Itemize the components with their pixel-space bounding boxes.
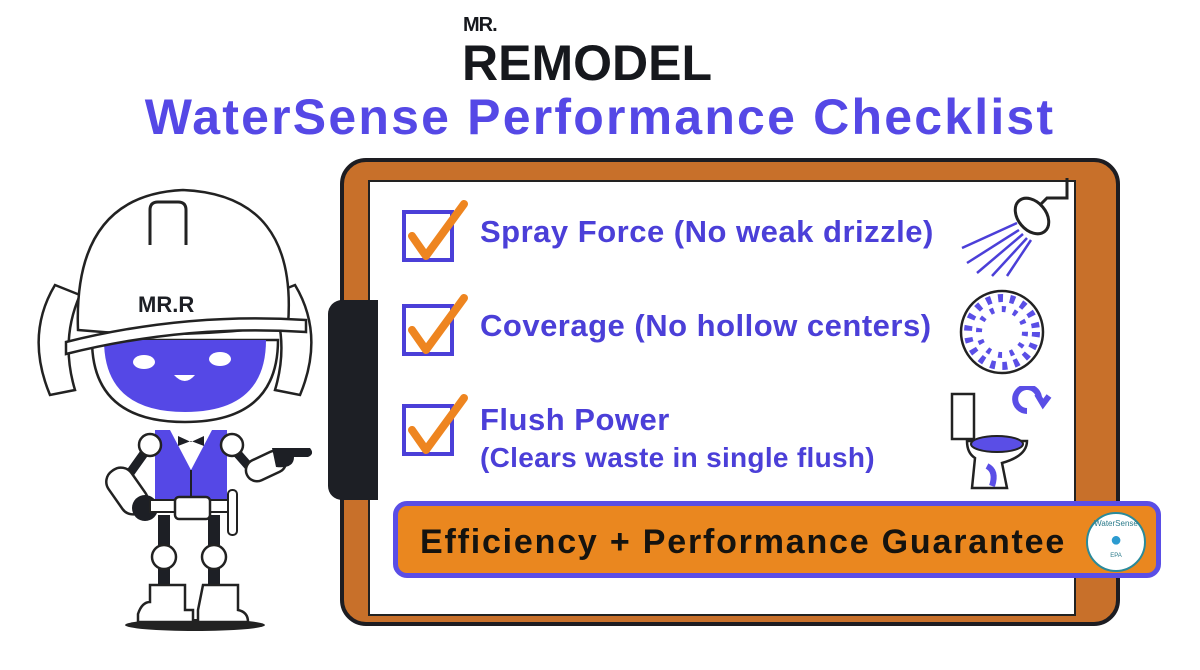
banner: Efficiency + Performance Guarantee — [420, 523, 1066, 561]
icon: shower — [962, 178, 1068, 277]
icon: watersense badge: ● — [1110, 529, 1122, 551]
icon: watersense badge: EPA — [1110, 553, 1122, 559]
paper — [368, 180, 1076, 616]
robot mascot: MR.R — [138, 292, 194, 317]
clipboard — [340, 158, 1120, 626]
logo: REMODEL — [462, 35, 712, 91]
row: spray force — [402, 178, 1068, 277]
robot mascot — [37, 188, 313, 631]
row: spray force: Spray Force (No weak drizzle) — [480, 214, 934, 249]
row: flush power: (Clears waste in single flush) — [480, 442, 875, 473]
row: coverage: Coverage (No hollow centers) — [480, 308, 932, 343]
icon: watersense badge: WaterSense — [1094, 519, 1138, 528]
row: flush power: Flush Power — [480, 402, 670, 437]
icon: coverage circle — [960, 290, 1044, 374]
checkbox 1 — [402, 210, 454, 262]
banner — [393, 501, 1161, 578]
logo: MR. — [463, 14, 497, 36]
icon: toilet — [950, 386, 1052, 490]
row: coverage — [402, 290, 1044, 374]
title: WaterSense Performance Checklist — [145, 89, 1055, 145]
clip tab — [328, 300, 378, 500]
row: flush power — [402, 386, 1052, 490]
icon: watersense badge — [1086, 512, 1146, 572]
